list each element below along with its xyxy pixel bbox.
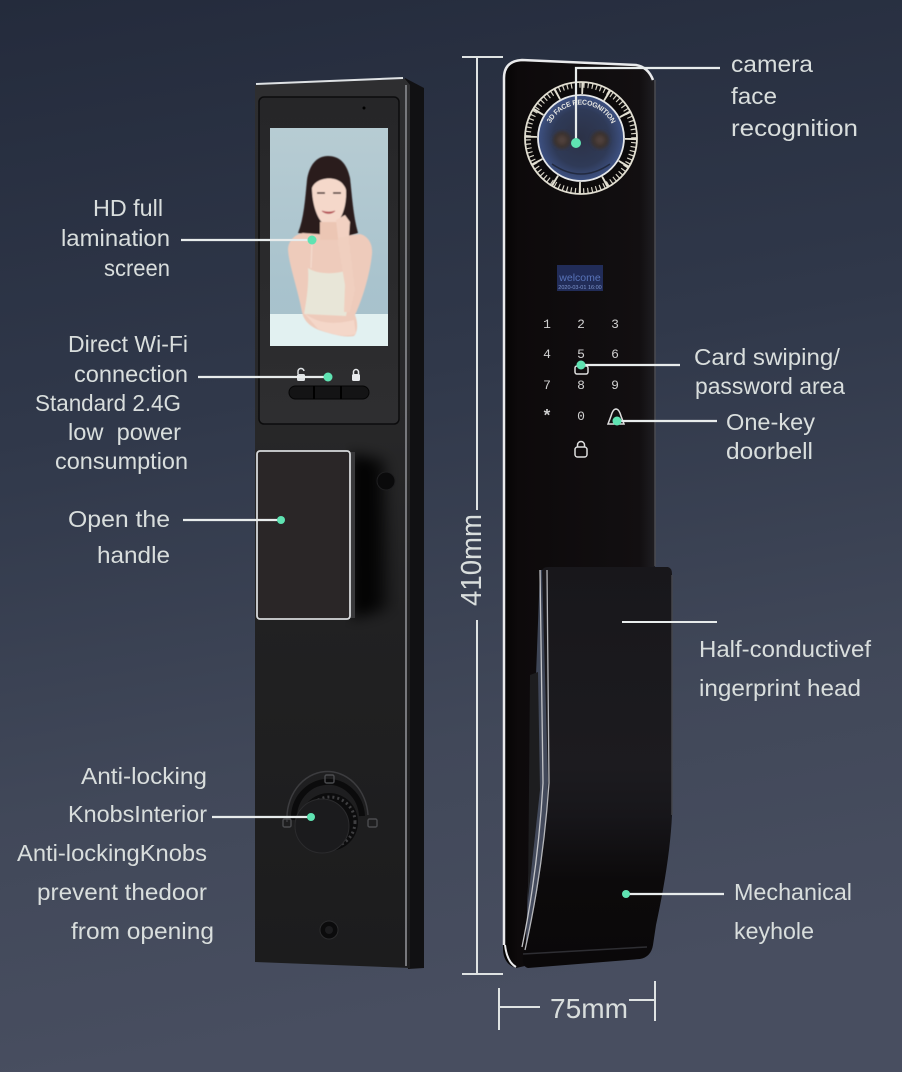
camera dial [524,81,638,195]
callout: fingerprint head: ingerprint head [699,675,861,701]
callout: card swiping [576,344,846,399]
keypad: 9 [611,378,619,393]
callout: anti-locking knob: prevent thedoor [37,879,207,905]
callout: mechanical keyhole [622,879,852,944]
callout: camera face recognition [571,51,858,148]
left lock: front view [255,78,424,969]
dimension: height 410mm: 410mm [456,514,488,606]
callout: camera face recognition: camera [731,51,814,77]
keypad lock icon [575,442,587,457]
arms and shoulders [288,233,372,337]
callout: open the handle [68,506,285,568]
keypad: 8 [577,378,585,393]
callout: card swiping: password area [695,373,846,399]
dimension: width 75mm: 75mm [550,993,628,1024]
camera dial: 3D FACE RECOGNITION [546,100,616,124]
callout: Wi-Fi: Standard 2.4G [35,390,181,416]
hair fringe [311,169,347,190]
callout: anti-locking knob: Anti-lockingKnobs [17,840,207,866]
callout: Wi-Fi: consumption [55,448,188,474]
callout: Wi-Fi: low power [68,419,181,445]
callout: anti-locking knob [17,763,315,944]
keypad: 0 [577,409,585,424]
callout: open the handle: handle [97,542,170,568]
keypad: 4 [543,347,551,362]
screen panel [259,97,399,424]
knob lock marks [283,775,377,827]
dimension: width 75mm [499,981,655,1030]
callout: card swiping: Card swiping/ [694,344,840,370]
camera lenses [553,131,609,149]
anti-lock knob [283,771,377,853]
keypad: 7 [543,378,551,393]
callout: HD screen: HD full [93,195,163,221]
hand on chin [336,215,350,238]
screw [377,472,395,490]
lock icon [352,370,360,381]
callout: HD screen: screen [104,255,170,281]
buttons [289,386,369,399]
callout: Wi-Fi: Direct Wi-Fi [68,331,188,357]
callout: doorbell [612,409,815,464]
keypad [542,317,619,427]
callout: Wi-Fi [35,331,332,474]
unlock icon [297,368,305,381]
callout: HD screen [61,195,316,281]
face [312,178,346,226]
callout: fingerprint head [622,622,871,701]
lock body [503,60,655,968]
callout: mechanical keyhole: Mechanical [734,879,852,905]
callout: anti-locking knob: from opening [71,918,214,944]
callout: camera face recognition: face [731,83,777,109]
callout: mechanical keyhole: keyhole [734,918,814,944]
lock side edge [405,78,424,969]
touchscreen portrait [270,128,388,346]
callout: anti-locking knob: KnobsInterior [68,801,207,827]
forearm [336,232,355,312]
hair [298,156,358,237]
slide handle [505,567,672,968]
folded hands [304,313,356,336]
keypad: 3 [611,317,619,332]
callout: anti-locking knob: Anti-locking [81,763,207,789]
keypad: 6 [611,347,619,362]
doorbell icon [608,409,624,424]
callout: open the handle: Open the [68,506,170,532]
keypad: 1 [543,317,551,332]
callout: Wi-Fi: connection [74,361,188,387]
right lock: side view [502,58,672,968]
callout: fingerprint head: Half-conductivef [699,636,871,662]
key cylinder [320,921,338,939]
dress [304,268,351,316]
dimension: height 410mm [456,57,503,974]
callout: doorbell: doorbell [726,438,813,464]
welcome display [557,265,603,291]
callout: camera face recognition: recognition [731,115,858,141]
lock front plate [255,79,410,968]
keypad: 5 [577,347,585,362]
welcome display: welcome [558,272,601,284]
welcome display: 2020-03-01 16:00 [558,285,602,291]
keypad: 2 [577,317,585,332]
handle [257,451,394,619]
callout: doorbell: One-key [726,409,815,435]
card icon [575,366,588,374]
keypad: * [542,408,552,427]
callout: HD screen: lamination [61,225,170,251]
